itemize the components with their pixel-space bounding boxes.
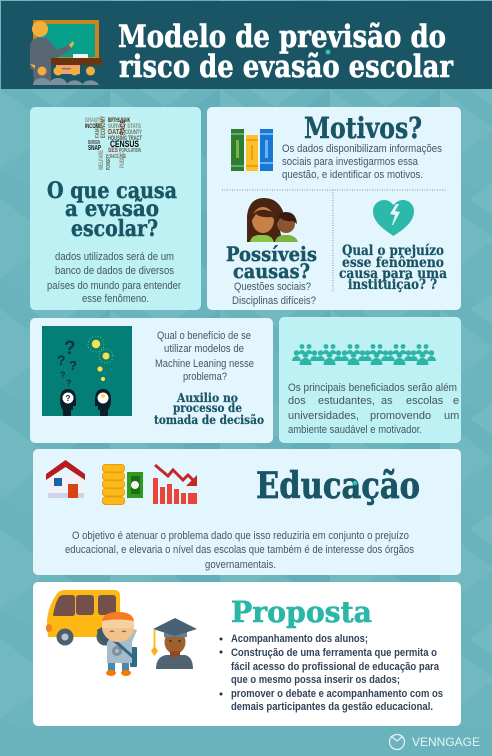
- heading: Proposta: [231, 595, 372, 629]
- word cloud: HOUSING TRACT: [108, 136, 142, 142]
- heading: possíveis causas: causas?: [233, 259, 310, 283]
- word cloud: POPULATION: [119, 148, 141, 154]
- word cloud: ECONOMY: [101, 116, 107, 138]
- panel: proposta: [33, 582, 461, 726]
- body text: promovendo: [370, 410, 431, 422]
- body text: Os dados disponibilizam informações: [282, 143, 442, 155]
- icon: teacher at blackboard: [30, 20, 102, 85]
- icon: falling bar chart: [153, 465, 197, 504]
- word cloud: RACE AGE: [110, 154, 126, 160]
- text: questions: Disciplinas difíceis?: [232, 295, 316, 307]
- icon: question marks and light bulbs: ?: [66, 378, 72, 388]
- word cloud: DATA: [108, 129, 123, 136]
- icon: groups of people: [292, 344, 436, 365]
- question text: Qual o benefício de se: [157, 330, 251, 342]
- question text: Machine Leaning nesse: [155, 358, 254, 370]
- text: questions: Questões sociais?: [234, 281, 311, 293]
- bullet list: demais participantes da gestão educacional.: [231, 701, 433, 713]
- icon: question marks and light bulbs: ?: [66, 394, 70, 403]
- heading: Educação: [256, 465, 420, 507]
- body text: um: [444, 410, 459, 422]
- heading: prejuízo: causa para uma: [339, 266, 447, 282]
- panel: benefício: [30, 318, 273, 443]
- panel: motivos: [207, 107, 461, 310]
- body text: estudantes,: [318, 395, 375, 407]
- bullet list: Construção de uma ferramenta que permita o: [231, 647, 437, 659]
- word cloud: COUNTY: [125, 130, 142, 136]
- text: questions: [232, 281, 316, 307]
- bullet list: fácil acesso do profissional de educação para: [231, 661, 440, 673]
- word cloud: PUBLIC: [120, 152, 126, 168]
- body text: as: [381, 395, 393, 407]
- icon: question marks and light bulbs: ?: [60, 370, 66, 380]
- panel: beneficiados: [279, 317, 461, 443]
- heading: O que causa: [47, 178, 177, 204]
- word cloud: SES: [108, 148, 118, 154]
- heading: prejuízo: Qual o prejuízo: [342, 243, 444, 259]
- heading: possíveis causas: [226, 242, 317, 283]
- icon: question marks and light bulbs: ?: [69, 358, 77, 373]
- word cloud: GRANTS: [85, 118, 102, 124]
- body text: educacional, e elevaria o nível das escolas que também é de interesse dos órgãos: [65, 544, 414, 556]
- heading: prejuízo: [339, 243, 447, 293]
- heading: prejuízo: esse fenômeno: [342, 255, 444, 271]
- body text: e: [453, 395, 459, 407]
- icon: question marks and light bulbs: ?: [64, 338, 76, 359]
- panel: o que causa: [30, 107, 201, 310]
- answer heading: Auxilio no: [176, 391, 238, 405]
- body text: esse fenômeno.: [82, 293, 149, 305]
- body text: sociais para investigarmos essa: [282, 156, 419, 168]
- word cloud: CENSUS: [110, 139, 139, 149]
- answer heading: tomada de decisão: [154, 413, 264, 427]
- icon: graduate: [151, 618, 197, 669]
- word cloud: RACE: [120, 120, 127, 135]
- body text: dos: [288, 395, 306, 407]
- heading: Motivos?: [304, 111, 422, 145]
- header banner: [1, 1, 492, 89]
- bullet list: que o mesmo possa inserir os dados;: [231, 674, 400, 686]
- icon: broken heart: [373, 200, 414, 236]
- word cloud: POVERTY: [106, 154, 112, 170]
- body text: dados utilizados será de um: [55, 251, 174, 263]
- icon: question marks and light bulbs: ?: [57, 352, 66, 368]
- answer heading: processo de: [173, 401, 242, 415]
- body text: Os principais beneficiados serão além: [288, 382, 457, 394]
- icon: school bus: [46, 590, 120, 646]
- icon: boy with backpack: [97, 612, 137, 676]
- title: [118, 19, 454, 85]
- word cloud: BURDEN: [88, 140, 100, 146]
- word cloud: INCOME: [85, 124, 102, 130]
- body text: governamentais.: [205, 559, 276, 571]
- body text: banco de dados de diversos: [55, 265, 174, 277]
- icon: books: [231, 129, 273, 171]
- question text: problema?: [183, 371, 227, 383]
- body text: [47, 251, 181, 305]
- logo: venngage: VENNGAGE: [412, 735, 480, 749]
- icon: coins and banknote: [102, 464, 143, 504]
- icon: question marks and light bulbs: [42, 326, 132, 416]
- word cloud: FAMILY: [95, 121, 101, 138]
- body text: questão, e identificar os motivos.: [282, 169, 423, 181]
- bullet list: promover o debate e acompanhamento com os: [231, 688, 443, 700]
- question text: [155, 330, 254, 383]
- heading: prejuízo: instituição? ?: [348, 276, 437, 293]
- word cloud: WELFARE: [99, 150, 105, 170]
- body text: O objetivo é atenuar o problema dado que isso reduziria em conjunto o prejuízo: [72, 530, 409, 542]
- body text: universidades,: [288, 410, 359, 422]
- icon: house: [46, 460, 85, 498]
- body text: países do mundo para entender: [47, 280, 181, 292]
- body text: escolas: [406, 395, 444, 407]
- word cloud: SNAP: [88, 145, 101, 152]
- bullet list: [220, 633, 443, 713]
- body text: [288, 382, 459, 436]
- heading: a evasão: [65, 196, 159, 222]
- word cloud: [85, 116, 142, 170]
- body text: [65, 530, 414, 571]
- question text: utilizar modelos de: [164, 343, 244, 355]
- icon: mother and child: [247, 198, 298, 242]
- body text: ambiente saudável e motivador.: [288, 424, 422, 436]
- heading: escolar?: [71, 216, 158, 242]
- heading: [47, 178, 177, 242]
- answer heading: [154, 391, 264, 427]
- heading: possíveis causas: Possíveis: [226, 242, 317, 266]
- bullet list: Acompanhamento dos alunos;: [231, 633, 368, 645]
- word cloud: SURVEY STATS: [108, 124, 141, 130]
- word cloud: BIRTHS RANK: [108, 118, 130, 124]
- body text: [282, 143, 442, 181]
- panel: educação: [33, 449, 461, 575]
